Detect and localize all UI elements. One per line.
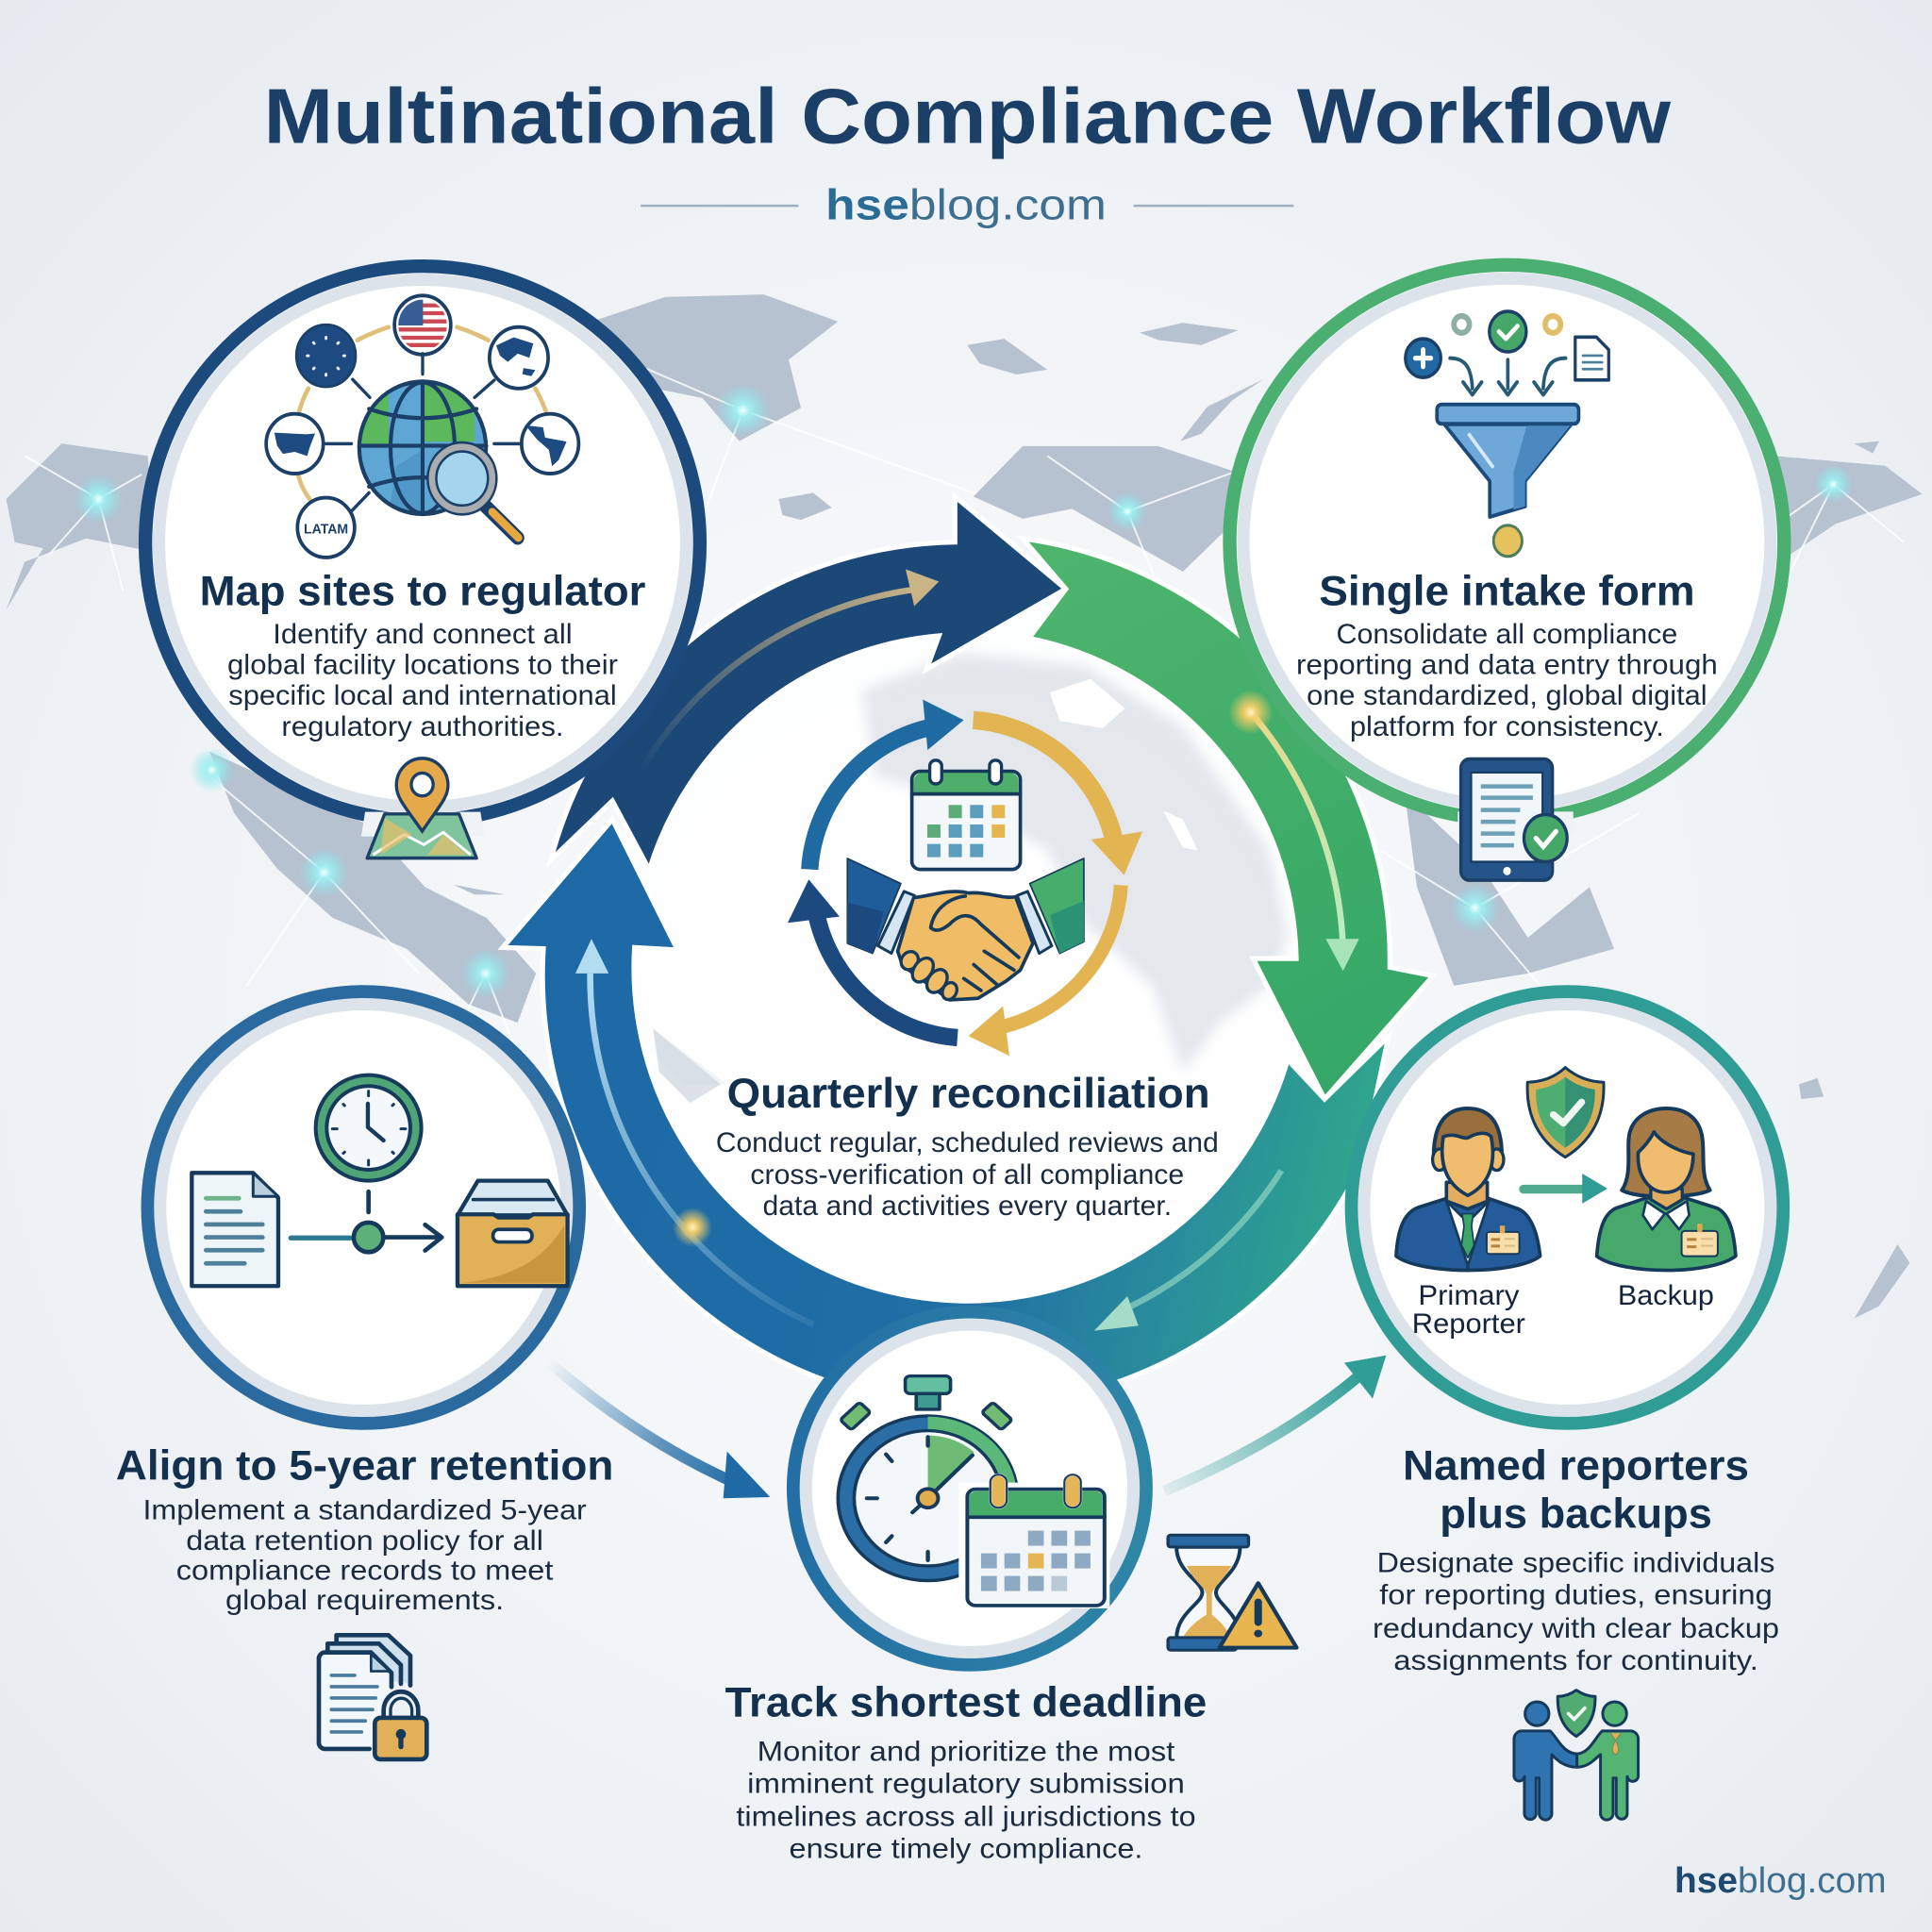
body text: map sites: global facility locations to their <box>227 649 618 680</box>
icon: hourglass with warning <box>1168 1535 1296 1650</box>
panel: quarterly reconciliation <box>716 700 1219 1222</box>
body text: map sites: specific local and international <box>228 680 617 711</box>
body text: single intake: Consolidate all compliance <box>1336 619 1677 650</box>
subtitle: hseblog.com: hse blog.com <box>825 180 1107 228</box>
world map backdrop <box>7 294 1923 1319</box>
body text: single intake <box>1296 619 1718 742</box>
connector arrow: deadline to reporters <box>1164 1356 1386 1491</box>
heading: named reporters plus backups: plus backups <box>1440 1491 1712 1538</box>
body text: retention: Implement a standardized 5-year <box>143 1494 587 1525</box>
title: Multinational Compliance Workflow <box>264 75 1672 160</box>
body text: reporters <box>1373 1548 1779 1676</box>
icon: primary reporter, shield, backup <box>1396 1068 1736 1272</box>
body text: quarterly reconciliation: cross-verification of all compliance <box>750 1159 1184 1191</box>
thin flow arrow: teal segment <box>1094 1171 1281 1331</box>
icon: regulator network around globe: LATAM <box>304 522 348 537</box>
body text: retention: data retention policy for all <box>186 1525 543 1557</box>
label: primary reporter <box>1412 1280 1525 1340</box>
body text: map sites: Identify and connect all <box>273 619 573 650</box>
icon: tablet with check <box>1457 759 1574 880</box>
connector arrow: retention to deadline <box>548 1361 770 1498</box>
label: primary reporter: Primary <box>1418 1280 1519 1311</box>
panel: single intake form <box>1230 265 1784 880</box>
thin flow arrow: green segment <box>1228 690 1359 971</box>
body text: reporters: redundancy with clear backup <box>1373 1613 1779 1644</box>
heading: named reporters plus backups: Named reporters <box>1403 1443 1749 1490</box>
body text: reporters: for reporting duties, ensuring <box>1379 1580 1773 1611</box>
body text: quarterly reconciliation: Conduct regular, scheduled reviews and <box>716 1127 1219 1158</box>
body text: single intake: platform for consistency. <box>1350 711 1664 742</box>
footer brand: hseblog.com: hseblog.com <box>1674 1861 1887 1901</box>
body text: map sites <box>227 619 618 742</box>
heading: named reporters plus backups <box>1403 1443 1749 1538</box>
panel: align to 5-year retention <box>148 991 579 1424</box>
heading: quarterly reconciliation: Quarterly reconciliation <box>727 1071 1210 1117</box>
panel: map sites to regulator <box>145 266 700 858</box>
panel: track shortest deadline <box>725 1312 1296 1865</box>
body text: quarterly reconciliation: data and activities every quarter. <box>762 1191 1172 1222</box>
body text: reporters: assignments for continuity. <box>1393 1645 1758 1676</box>
body text: quarterly reconciliation <box>716 1127 1219 1222</box>
icon: funnel with inputs <box>1406 311 1608 557</box>
body text: retention: compliance records to meet <box>176 1555 554 1586</box>
body text: track deadline <box>736 1736 1196 1865</box>
thin flow arrow: navy segment <box>641 569 939 770</box>
arrow: blue-teal ring segment back to map sites <box>503 820 1389 1407</box>
icon: regulator network around globe <box>266 295 578 558</box>
body text: reporters: Designate specific individuals <box>1377 1548 1774 1579</box>
body text: map sites: regulatory authorities. <box>281 711 564 742</box>
body text: track deadline: Monitor and prioritize the most <box>758 1736 1175 1767</box>
icon: two people shaking hands with shield <box>1514 1690 1639 1820</box>
heading: single intake: Single intake form <box>1319 568 1695 614</box>
icon: document, clock and archive box <box>192 1075 568 1286</box>
body text: track deadline: timelines across all jurisdictions to <box>736 1802 1196 1833</box>
map network lines and glowing nodes <box>25 345 1904 1084</box>
icon: map pin on folded map <box>361 758 484 858</box>
body text: track deadline: ensure timely compliance. <box>790 1834 1142 1865</box>
body text: single intake: one standardized, global digital <box>1307 680 1707 711</box>
body text: track deadline: imminent regulatory submission <box>747 1768 1185 1799</box>
thin flow arrow: blue segment <box>575 939 813 1324</box>
label: primary reporter: Reporter <box>1412 1308 1525 1340</box>
label: backup: Backup <box>1618 1280 1714 1311</box>
body text: single intake: reporting and data entry through <box>1296 649 1718 680</box>
center backdrop: globe behind reconciliation panel <box>597 597 1337 1337</box>
body text: retention: global requirements. <box>225 1585 504 1616</box>
body text: retention <box>143 1494 587 1616</box>
heading: align to 5-year retention: Align to 5-year retention <box>116 1443 613 1490</box>
icon: stopwatch with calendar <box>838 1376 1109 1608</box>
icon: locked document stack <box>319 1635 426 1759</box>
arrow: green ring segment to named reporters <box>1023 539 1433 1099</box>
heading: map sites: Map sites to regulator <box>200 568 645 614</box>
icon: cycle arrows with calendar and handshake <box>788 700 1142 1056</box>
panel: named reporters plus backups <box>1352 991 1783 1424</box>
arrow: navy ring segment to single intake form <box>551 496 1066 870</box>
heading: track deadline: Track shortest deadline <box>725 1679 1207 1725</box>
